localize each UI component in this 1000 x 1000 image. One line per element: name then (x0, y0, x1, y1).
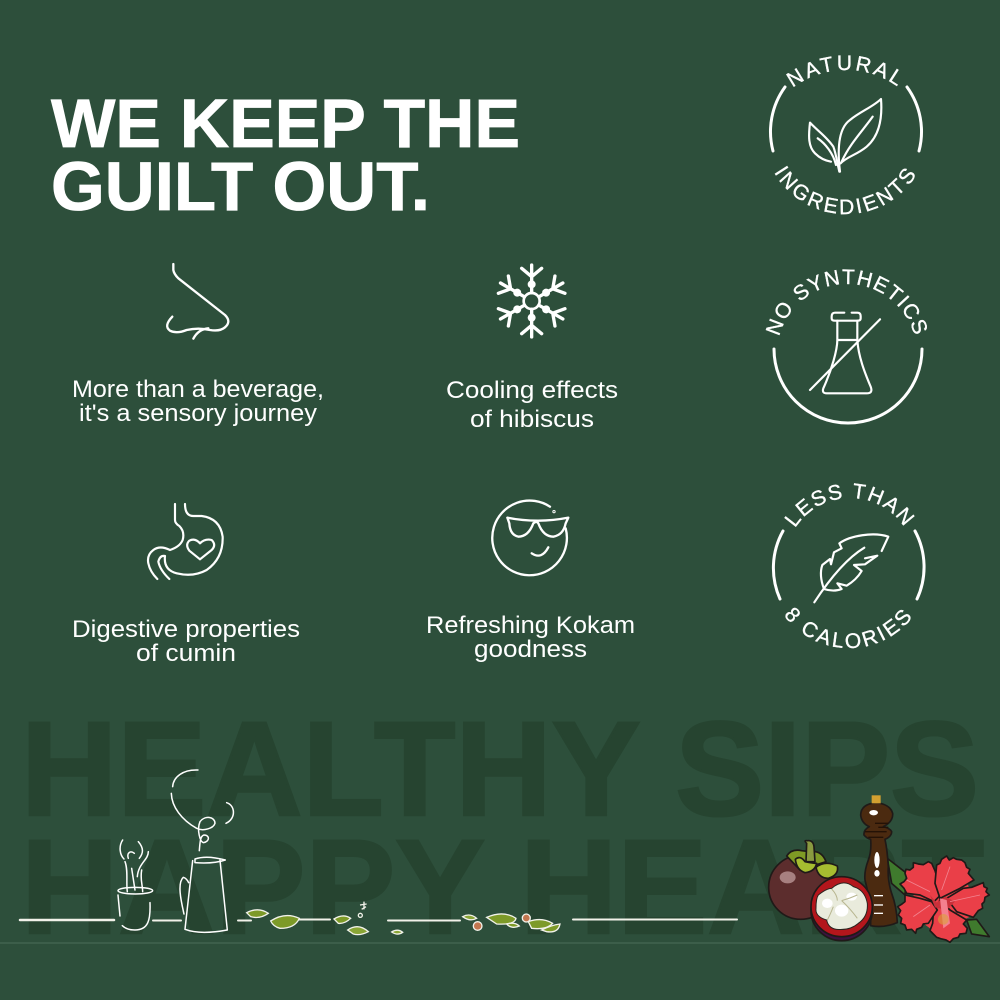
text: cooling effects (446, 377, 618, 433)
illustration: mangosteen, pepper mill, hibiscus (769, 795, 989, 942)
ghost watermark text: HEALTHY SIPS (21, 695, 979, 844)
badge: less than 8 calories (772, 483, 926, 648)
text: kokam (426, 612, 635, 663)
text: cooling effects: Cooling effects (446, 377, 618, 404)
illustration: kettle with steam (171, 770, 233, 932)
icon: crossed flask (810, 313, 880, 393)
leaf behind mill (887, 858, 907, 895)
ghost watermark text: HAPPY HEART (21, 813, 984, 962)
pepper mill (861, 795, 897, 927)
whole mangosteen (769, 841, 838, 919)
text: cooling effects: of hibiscus (470, 406, 594, 433)
title: WE KEEP THE (51, 85, 520, 162)
opened mangosteen (811, 877, 872, 941)
text: digestive properties (72, 616, 300, 667)
badge: no synthetics (766, 269, 927, 424)
icon: leaves (809, 99, 881, 172)
text: kokam: goodness (474, 636, 587, 663)
illustration: shelf lines (20, 920, 737, 921)
title: GUILT OUT. (51, 148, 430, 225)
badge: natural ingredients (768, 55, 923, 214)
illustration: steaming cup (118, 840, 153, 930)
text: sensory journey: More than a beverage, (72, 376, 324, 403)
text: sensory journey: it's a sensory journey (79, 400, 317, 427)
ghost watermark text (21, 695, 984, 962)
text: sensory journey (72, 376, 324, 427)
icon: snowflake (495, 265, 568, 337)
icon: nose (167, 264, 228, 339)
title (51, 85, 520, 225)
illustration: leaves and seeds (247, 902, 560, 935)
icon: feather (814, 534, 888, 602)
badge: less than 8 calories: 8 CALORIES (785, 608, 911, 648)
badge: less than 8 calories: LESS THAN (784, 483, 915, 527)
text: digestive properties: of cumin (136, 640, 236, 667)
bottom baseline (0, 942, 1000, 944)
text: kokam: Refreshing Kokam (426, 612, 635, 639)
hibiscus (898, 856, 989, 942)
badge: natural ingredients: INGREDIENTS (774, 166, 915, 214)
icon: stomach with heart (148, 504, 223, 579)
badge: natural ingredients: NATURAL (786, 55, 899, 87)
text: digestive properties: Digestive properties (72, 616, 300, 643)
badge: no synthetics: NO SYNTHETICS (766, 269, 927, 336)
icon: smiley with sunglasses (492, 501, 568, 575)
